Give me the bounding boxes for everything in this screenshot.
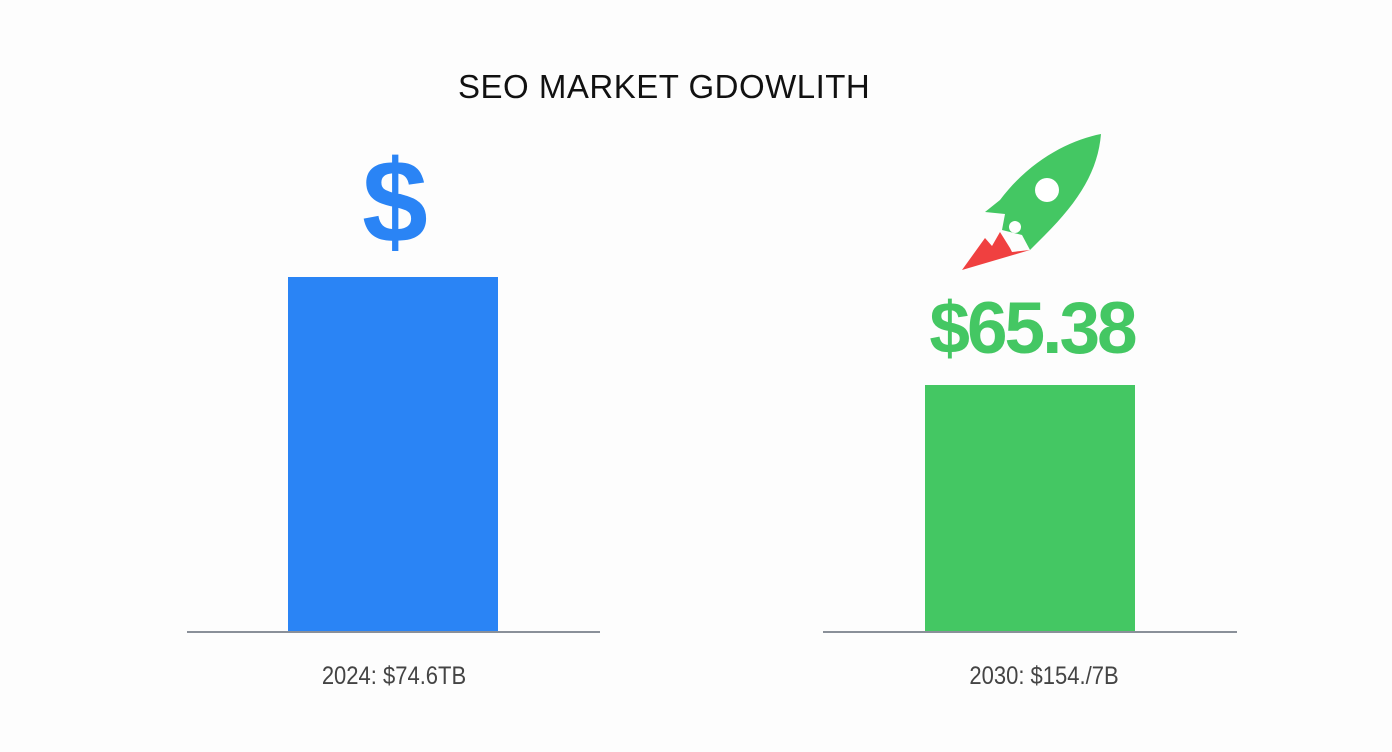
value label: $65.38 xyxy=(929,288,1135,369)
label 2024: 2024: $74.6TB xyxy=(322,662,466,690)
icon: rocket xyxy=(962,134,1101,270)
bar: 2024 xyxy=(288,277,498,632)
bar: 2030 xyxy=(925,385,1135,632)
axis left xyxy=(187,631,600,633)
title: SEO MARKET GDOWLITH xyxy=(458,68,870,105)
icon: dollar sign: $ xyxy=(362,136,428,268)
label 2030: 2030: $154./7B xyxy=(969,662,1119,690)
axis right xyxy=(823,631,1237,633)
